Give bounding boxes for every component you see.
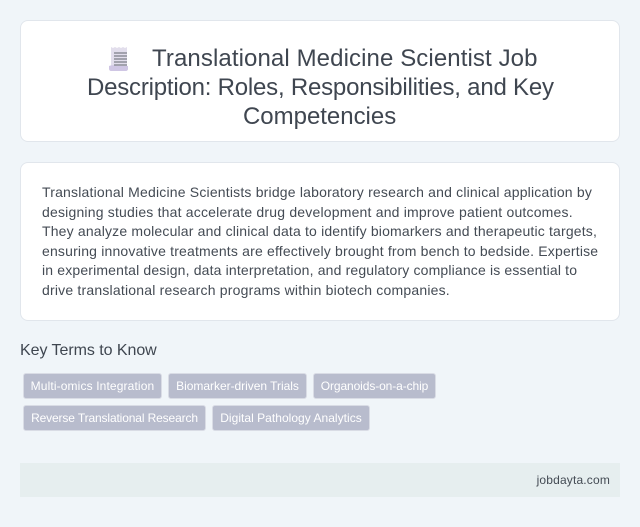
text block: description: designing studies that accelerate drug development and improve patient outcomes. [42,204,573,220]
footer bar [20,463,620,497]
title: Description: Roles, Responsibilities, and Key [87,74,554,101]
panel: title card [20,20,620,142]
footer text: jobdayta.com [537,473,610,487]
tag: reverse translational [23,405,206,431]
title: Translational Medicine Scientist Job [152,45,538,72]
tag: organoids: Organoids-on-a-chip [321,379,428,393]
icon: document scroll [109,47,128,71]
text block: description: drive translational research programs within biotech companies. [42,282,450,298]
title: Competencies [243,103,396,130]
tag: digital pathology: Digital Pathology Analytics [220,411,362,425]
tag list: key terms [23,373,436,431]
heading: key terms: Key Terms to Know [20,342,157,359]
tag: biomarker [168,373,307,399]
text block: description: Translational Medicine Scientists bridge laboratory research and clinical application by [42,184,592,200]
text block: description: They analyze molecular and clinical data to identify biomarkers and therapeutic targets, [42,223,597,239]
tag: multi-omics: Multi-omics Integration [31,379,154,393]
tag: digital pathology [212,405,370,431]
tag: biomarker: Biomarker-driven Trials [176,379,299,393]
tag: multi-omics [23,373,162,399]
title [87,45,554,130]
tag: reverse translational: Reverse Translational Research [31,411,198,425]
tag: organoids [313,373,436,399]
text block: description: in experimental design, data interpretation, and regulatory compliance is essential to [42,262,577,278]
text block: description [42,184,598,298]
text block: description: ensuring innovative treatments are effectively brought from bench to bedside. Expertise [42,242,598,258]
panel: description card [20,162,620,321]
